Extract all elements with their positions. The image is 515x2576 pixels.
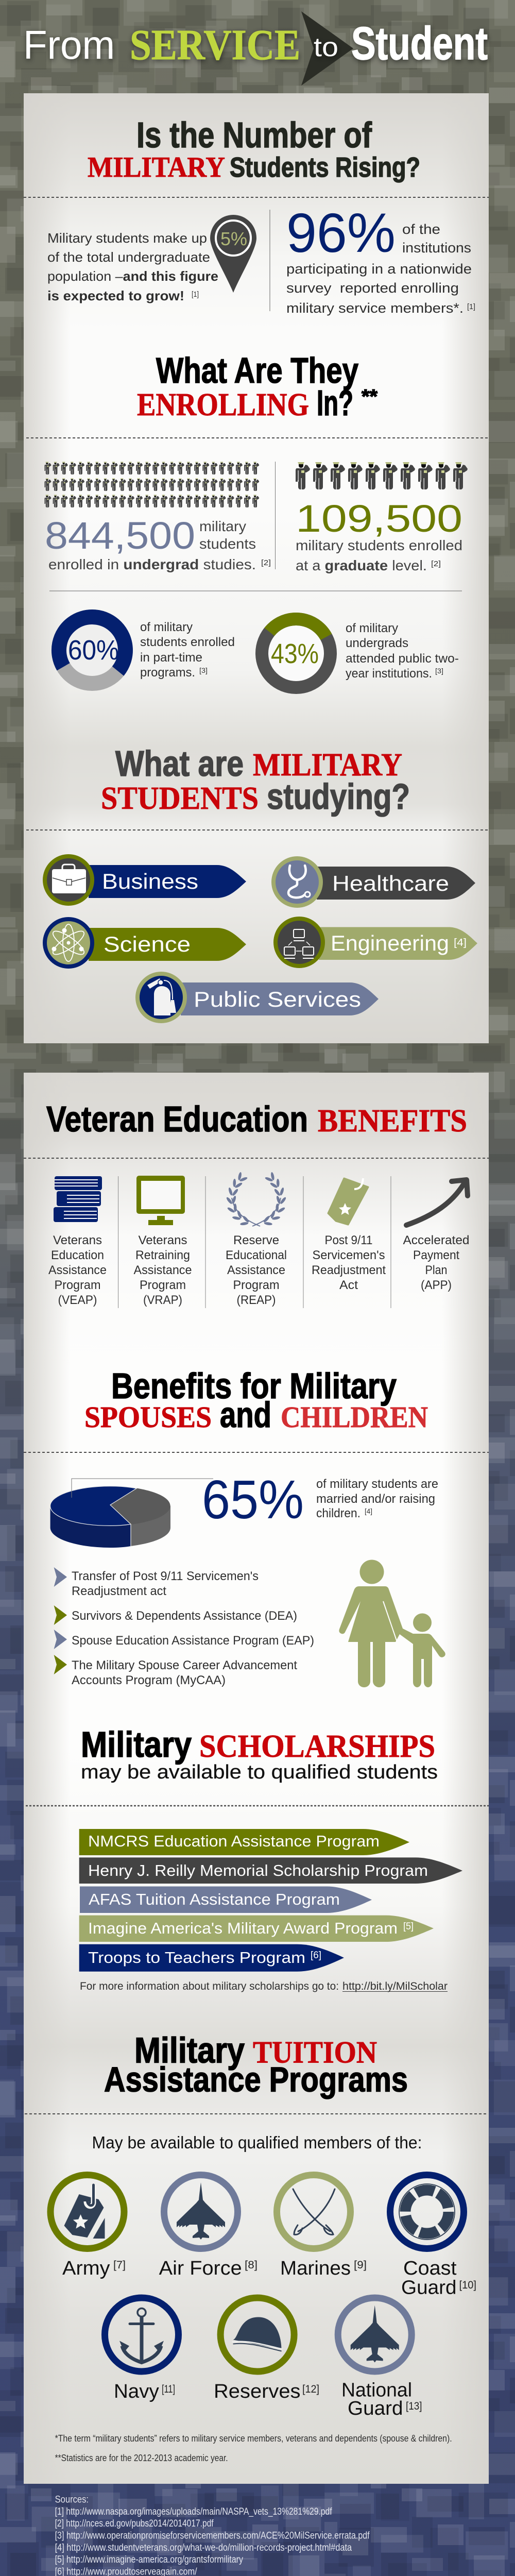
pill: public services [138,974,379,1021]
text: VEAP: Veterans [53,1233,102,1247]
text: VRAP: Veterans [138,1233,187,1247]
stat: 109,500 graduates: military students enrolled [296,537,462,553]
badge: marines [277,2175,367,2279]
text: part-time programs: programs. [140,666,195,680]
text: REAP: Reserve [233,1233,279,1247]
sources list: Sources: [55,2494,89,2505]
donut: 60% part-time [59,617,126,683]
bullet item: MyCAA [54,1655,297,1687]
stat: 65% married: of military students are [316,1477,438,1491]
chart: 65% pie [50,1479,213,1548]
bar: Troops to Teachers: [6] [311,1950,321,1961]
badge: reserves [214,2298,319,2402]
badge: marines: [9] [354,2259,367,2271]
stat: 65% married: 65% [202,1469,304,1530]
bullet item: transfer [54,1567,259,1598]
bar: NMCRS [79,1829,409,1855]
heading: is the number rising: Is the Number of [136,115,372,155]
icon: books [54,1176,102,1222]
stat: 65% married [202,1469,438,1530]
heading: military scholarships: Military [81,1724,192,1765]
icon: mother and child [339,1560,445,1687]
text: part-time programs: in part-time [140,651,202,665]
sources list: [4] http://www.studentveterans.org/what-we-do/million-records-project.html#data [55,2543,352,2553]
badge: army [50,2175,126,2279]
stat: 96% of institutions: institutions [402,240,471,256]
text: VRAP: Retraining [135,1248,190,1262]
text: five percent statement: of the total undergraduate [47,249,210,265]
bullet item: MyCAA: Accounts Program (MyCAA) [72,1673,226,1687]
heading: what are military students studying: MILITARY [253,748,402,783]
badge: coast guard: Guard [401,2277,456,2299]
badge: marines: Marines [280,2258,351,2279]
text: two-year institutions: [3] [435,667,443,675]
pill: science [45,919,246,967]
bullet item: DEA: Survivors & Dependents Assistance (DEA) [72,1609,297,1623]
text: post 9/11: Servicemen's [312,1248,385,1262]
bar: AFAS [80,1887,372,1913]
text: five percent statement: [1] [192,290,199,299]
text: post 9/11: Post 9/11 [324,1233,373,1247]
heading: what are they enrolling in: ENROLLING [137,387,309,422]
text: scholarship link: http://bit.ly/MilScholar [342,1980,448,1992]
stat: 109,500 graduates: [2] [431,560,441,568]
stat: 109,500 graduates: 109,500 [296,497,462,540]
heading: benefits for spouses and children [84,1366,428,1435]
text: part-time programs [140,620,235,680]
text: REAP: (REAP) [237,1293,276,1307]
heading: is the number rising: MILITARY [88,151,225,183]
stat: 96% of institutions: military service members*. [286,300,464,316]
text: VRAP [134,1233,192,1307]
stat: 109,500 graduates [296,497,462,573]
sources list [55,2494,447,2576]
text: REAP: Program [233,1278,279,1292]
stat: 844,500 undergrads: [2] [261,558,271,567]
text: post 9/11: Act [339,1278,358,1292]
heading: military tuition assistance programs: Military [134,2030,245,2070]
stat: 96% of institutions [286,201,475,316]
bar: Troops to Teachers [79,1944,344,1972]
donut: 60% part-time: 60% [68,635,119,666]
badge: reserves: [12] [302,2383,319,2395]
text: part-time programs: of military [140,620,193,634]
pill: healthcare [273,858,475,906]
heading: military scholarships [81,1724,438,1783]
stat: 96% of institutions: 96% [286,201,396,264]
text: VEAP: Program [55,1278,101,1292]
heading: military tuition assistance programs: Assistance Programs [104,2060,408,2099]
stat: 96% of institutions: [1] [467,302,475,311]
panel: enrollment statistics [24,93,489,1043]
text: part-time programs: [3] [199,666,208,674]
text: APP: Payment [413,1248,459,1262]
badge: coast guard: Coast [403,2258,457,2279]
icon: dog tag [328,1178,368,1225]
badge: coast guard: [10] [459,2279,476,2291]
text: REAP: Educational [226,1248,287,1262]
badge: navy: [11] [162,2383,175,2395]
pill: business: Business [102,869,198,893]
icon: laurel wreath [226,1171,287,1228]
badge: navy [105,2298,178,2402]
heading: what are military students studying: What are [115,743,244,784]
badge: air force: [8] [245,2259,258,2271]
stat: 65% married: children. [316,1506,360,1520]
heading: what are they enrolling in [137,350,377,423]
heading: military tuition assistance programs: TUITION [253,2035,377,2069]
heading: what are they enrolling in: ** [362,386,377,408]
pill: engineering: Engineering [331,931,449,955]
sources list: [5] http://www.imagine-america.org/grantsformilitary [55,2554,243,2565]
text: VEAP: Education [51,1248,104,1262]
bar: Troops to Teachers: Troops to Teachers Program [88,1948,305,1967]
text: post 9/11 [312,1233,386,1292]
badge: coast guard [390,2175,476,2299]
bar: Imagine America: Imagine America's Military Award Program [88,1919,398,1937]
heading: is the number rising [88,115,420,183]
stat: 844,500 undergrads: enrolled in undergrad studies. [48,556,256,572]
icon: rising arrow [406,1180,468,1225]
footnotes: *The term “military students” refers to military service members, veterans and dependents (spouse & children). [55,2433,452,2444]
footnotes: **Statistics are for the 2012-2013 academic year. [55,2453,228,2463]
text: five percent statement [47,230,218,303]
bar: Imagine America [79,1916,434,1942]
text: five percent statement: is expected to grow! [47,288,184,303]
text: APP: (APP) [421,1278,452,1292]
badge: reserves: Reserves [214,2381,301,2402]
text: REAP: Assistance [227,1263,285,1277]
title: From [23,22,115,67]
text: two-year institutions: year institutions. [346,667,432,681]
icon: map pin with 5% [210,215,256,293]
title: to [314,32,338,62]
bullet item: MyCAA: The Military Spouse Career Advancement [72,1658,297,1672]
pill: science: Science [104,932,191,956]
badge: navy: Navy [114,2381,159,2402]
stat: 65% married: [4] [365,1507,372,1515]
text: five percent statement: population –and this figure [47,268,218,284]
pill: business [45,856,246,904]
text: five percent statement: Military students make up [47,230,207,246]
sources list: [2] http://nces.ed.gov/pubs2014/2014017.pdf [55,2518,214,2529]
text: VRAP: Program [140,1278,186,1292]
text: APP: Plan [425,1263,447,1277]
text: VEAP [48,1233,107,1307]
text: may be available: May be available to qualified members of the: [92,2133,422,2152]
badge: national guard [338,2298,422,2419]
text: part-time programs: students enrolled [140,635,235,649]
text: APP: Accelerated [403,1233,470,1247]
heading: military tuition assistance programs [104,2030,408,2099]
sources list: [3] http://www.operationpromiseforservicemembers.com/ACE%20MilService.errata.pdf [55,2531,370,2541]
heading: military scholarships: SCHOLARSHIPS [199,1729,435,1764]
badge: national guard: Guard [348,2398,403,2419]
text: scholarship link: For more information about military scholarships go to: [80,1980,339,1992]
heading: is the number rising: Students Rising? [230,152,420,183]
badge: national guard: [13] [406,2400,422,2412]
stat: 109,500 graduates: at a graduate level. [296,557,427,573]
heading: benefits for spouses and children: CHILDREN [281,1400,428,1434]
badge: army: [7] [113,2259,126,2271]
pill: healthcare: Healthcare [332,871,449,895]
bar: Henry J. Reilly [79,1857,462,1884]
heading: military scholarships: may be available to qualified students [81,1761,438,1783]
bullet item: transfer: Readjustment act [72,1584,166,1598]
title [23,11,488,86]
bar: Imagine America: [5] [403,1921,414,1932]
text: VEAP: (VEAP) [58,1293,97,1307]
heading: what are military students studying: studying? [267,776,410,817]
heading: benefits for spouses and children: and [220,1395,271,1435]
icon: map pin with 5%: 5% [220,228,247,249]
icons: graduate soldiers [296,462,468,489]
heading: what are military students studying: STUDENTS [101,781,259,816]
icon: monitor [136,1176,185,1225]
footnotes [55,2433,452,2463]
pill: public services: Public Services [194,987,361,1011]
badge: army: Army [62,2258,110,2279]
bar: AFAS: AFAS Tuition Assistance Program [89,1890,340,1908]
list: spouse and child benefits [54,1567,314,1687]
bullet item: EAP [54,1630,314,1649]
text: two-year institutions: attended public two- [346,652,459,666]
panel: benefits and programs [24,1073,489,2484]
badge: national guard: National [341,2379,412,2401]
heading: benefits for spouses and children: SPOUSES [84,1400,212,1434]
text: REAP [226,1233,287,1307]
heading: what are military students studying [101,743,410,817]
heading: veteran education benefits: BENEFITS [318,1104,467,1139]
stat: 96% of institutions: participating in a nationwide [286,261,472,277]
badge: air force [159,2175,258,2279]
pill: engineering [276,919,477,966]
arrow behind title [301,11,353,86]
icons: undergraduate soldier rows [44,461,261,507]
bar: NMCRS: NMCRS Education Assistance Program [88,1832,380,1850]
text: two-year institutions: of military [346,621,398,635]
text: VEAP: Assistance [48,1263,107,1277]
badge: air force: Air Force [159,2258,242,2279]
stat: 844,500 undergrads: military [199,518,246,534]
stat: 844,500 undergrads: students [199,536,256,552]
bullet item: DEA [54,1605,297,1625]
text: post 9/11: Readjustment [312,1263,386,1277]
title: SERVICE [130,21,300,69]
pill: engineering: [4] [454,937,467,948]
stat: 844,500 undergrads: 844,500 [45,514,195,557]
text: VRAP: Assistance [134,1263,192,1277]
bullet item: transfer: Transfer of Post 9/11 Servicemen's [72,1569,259,1583]
heading: what are they enrolling in: In? [317,383,353,423]
bullet item: EAP: Spouse Education Assistance Program (EAP) [72,1634,314,1648]
donut: 43% two-year: 43% [271,638,319,669]
bar: Henry J. Reilly: Henry J. Reilly Memorial Scholarship Program [88,1861,428,1879]
stat: 65% married: married and/or raising [316,1492,435,1506]
text: two-year institutions: undergrads [346,636,408,650]
heading: what are they enrolling in: What Are They [156,350,358,391]
heading: benefits for spouses and children: Benefits for Military [111,1366,397,1406]
sources list: [1] http://www.naspa.org/images/uploads/main/NASPA_vets_13%281%29.pdf [55,2506,332,2517]
heading: veteran education benefits: Veteran Education [46,1099,308,1139]
text: APP [403,1233,470,1292]
text: two-year institutions [346,621,459,681]
stat: 96% of institutions: of the [402,222,440,237]
text: VRAP: (VRAP) [143,1293,182,1307]
donut: 43% two-year [262,619,331,687]
stat: 96% of institutions: survey reported enrolling [286,280,459,296]
stat: 844,500 undergrads [45,514,271,572]
